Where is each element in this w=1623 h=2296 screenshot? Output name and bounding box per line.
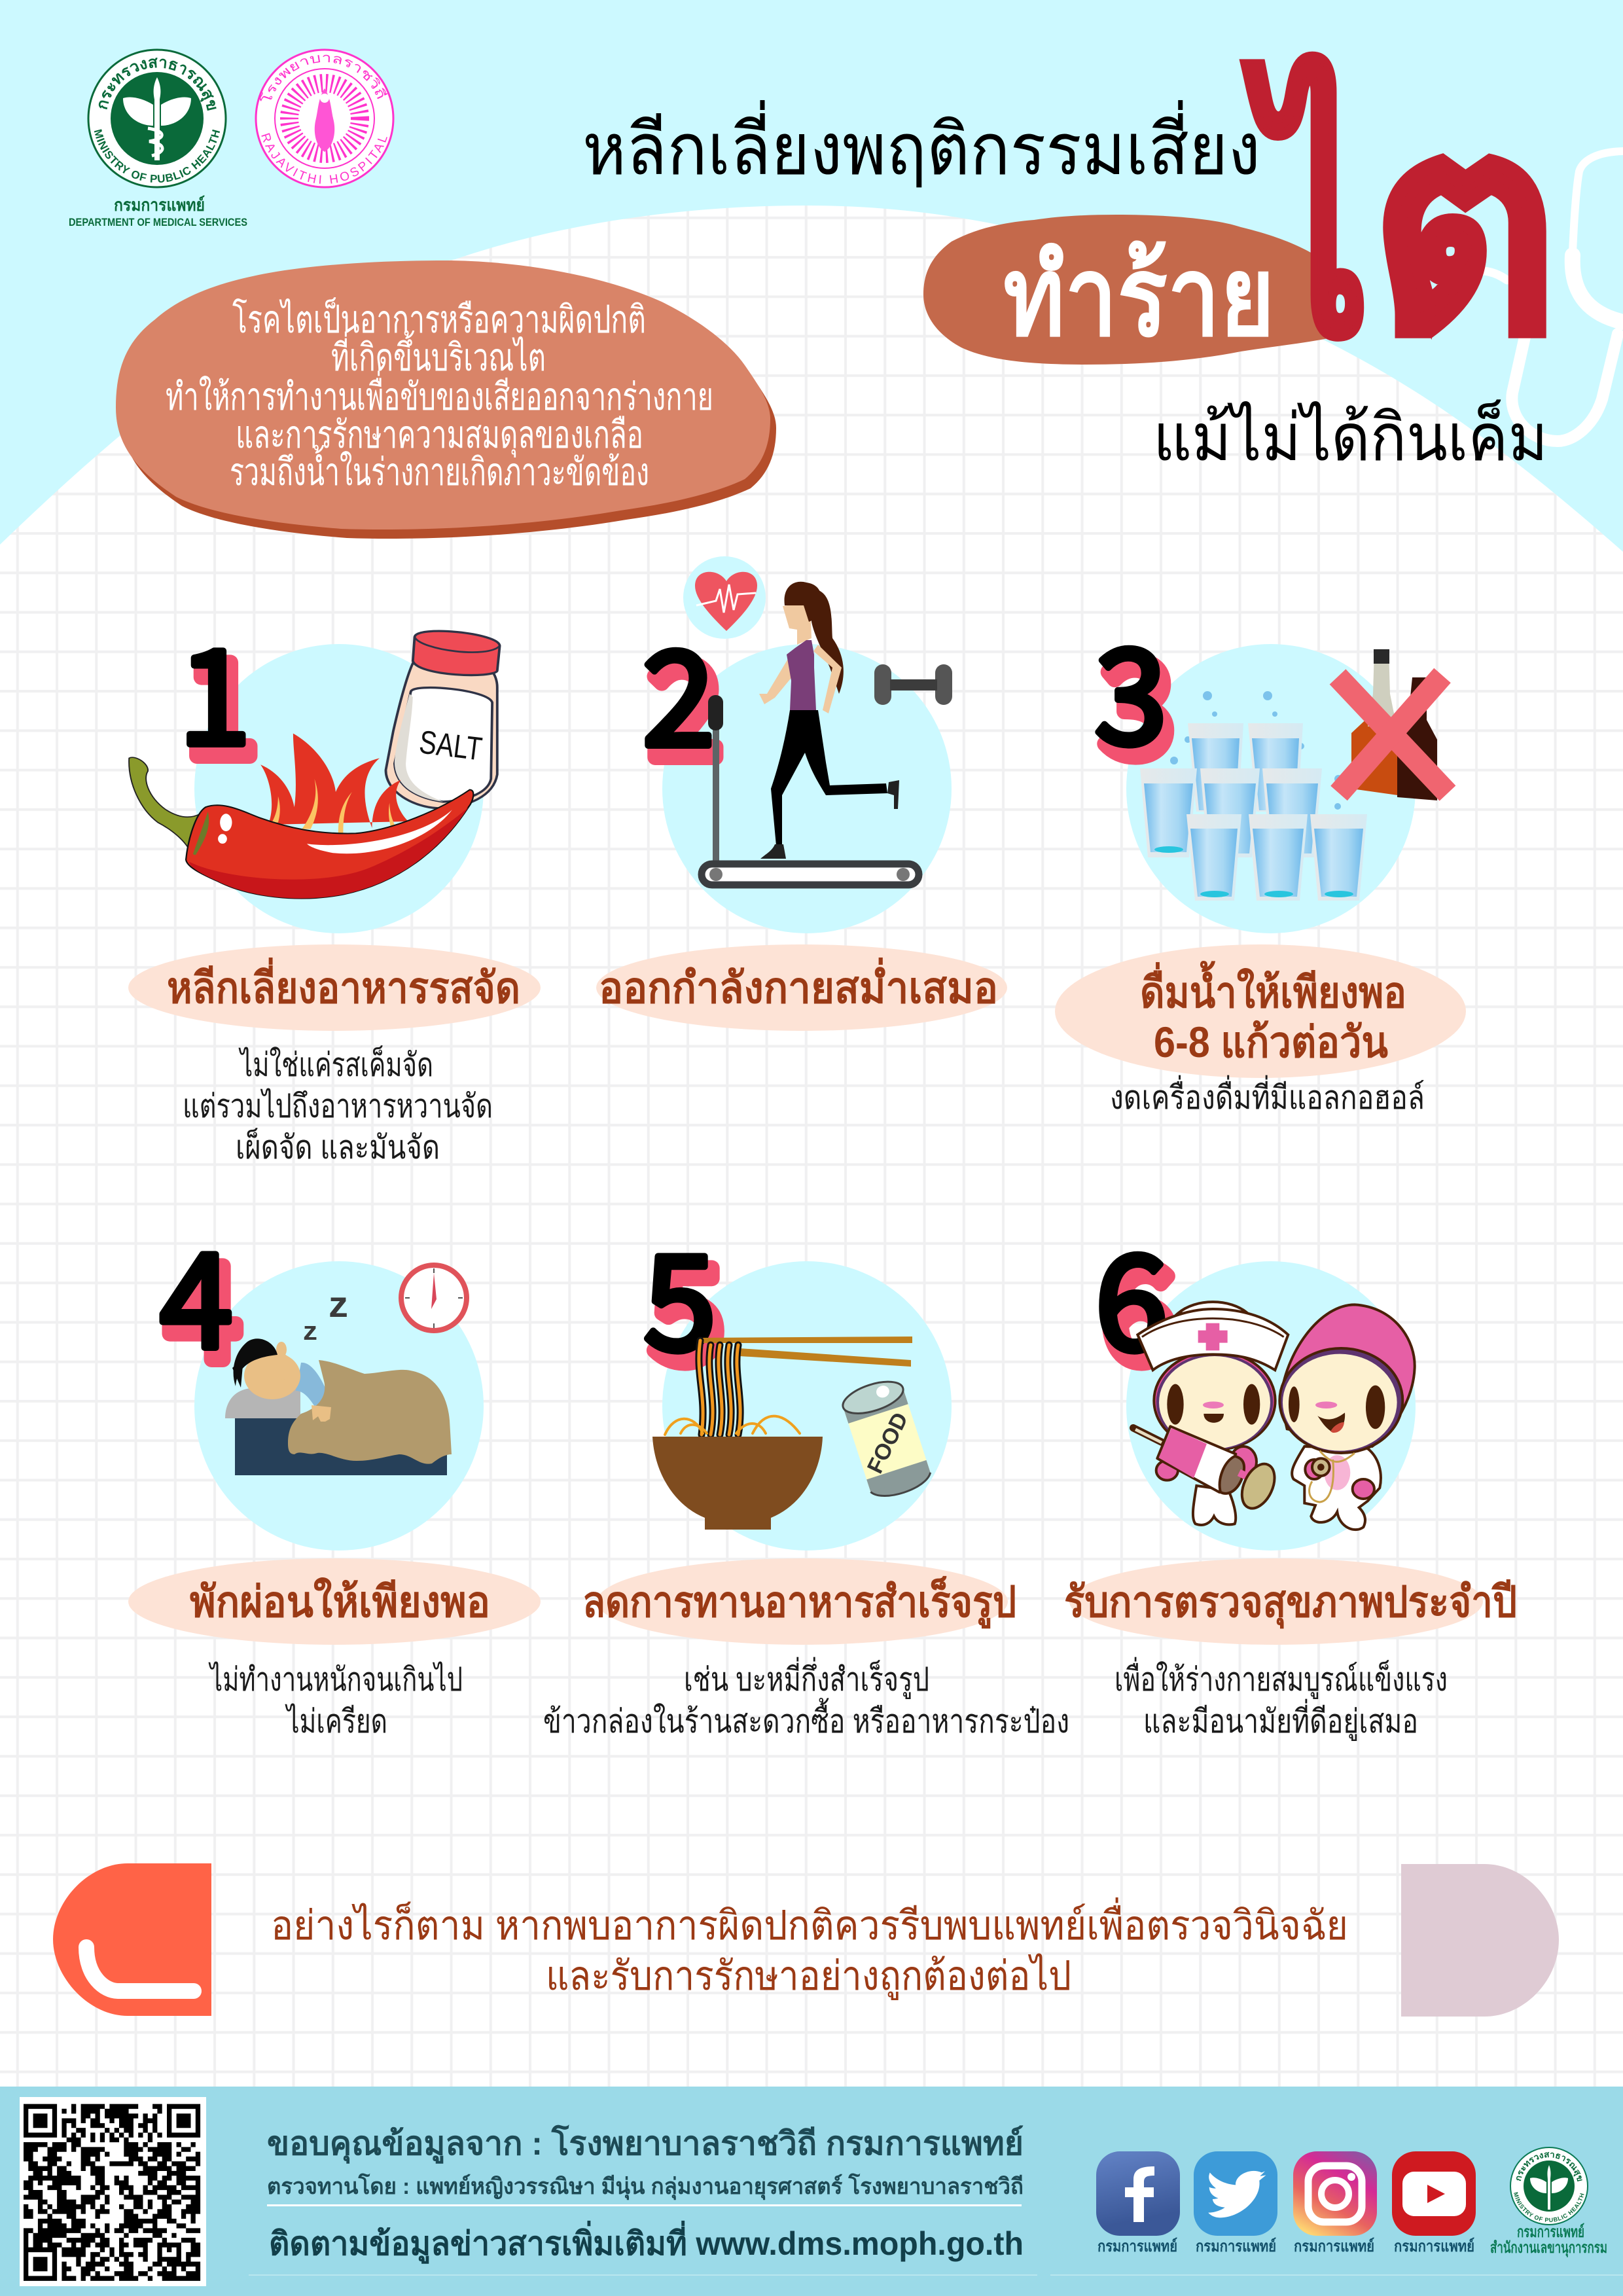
heading: tip 3: 6-8 แก้วต่อวัน	[1154, 1018, 1388, 1066]
heading: tip 5: ลดการทานอาหารสำเร็จรูป	[582, 1575, 1016, 1629]
text: tip 6 detail: เพื่อให้ร่างกายสมบูรณ์แข็งแรง	[1115, 1657, 1448, 1699]
noodles	[665, 1340, 800, 1435]
pill: tip 6 heading	[1069, 1558, 1483, 1645]
number 2: 2	[642, 594, 715, 783]
panel: description blob	[116, 260, 776, 539]
title: kidney word	[1239, 50, 1560, 399]
icon: instagram	[1293, 2151, 1377, 2236]
bracket: orange left	[53, 1863, 211, 2016]
number 4: 4	[160, 1196, 233, 1386]
bed	[235, 1418, 447, 1475]
title: highlight word: ทำร้าย	[1003, 235, 1275, 359]
text: tip 4 detail: ไม่ทำงานหนักจนเกินไป	[208, 1661, 463, 1698]
description text: ทำให้การทำงานเพื่อขับของเสียออกจากร่างกาย	[166, 370, 713, 418]
description text: และการรักษาความสมดุลของเกลือ	[236, 414, 643, 458]
social labels: กรมการแพทย์	[1097, 2237, 1177, 2255]
hand	[312, 1405, 331, 1422]
icon: ministry seal small: MINISTRY OF PUBLIC HEALTH	[1514, 2192, 1584, 2222]
back row glasses	[1188, 723, 1303, 812]
pill: tip 4 heading	[128, 1558, 541, 1645]
bracket: pale pink right	[1401, 1864, 1559, 2017]
red cross	[1338, 675, 1448, 793]
panel: footer	[0, 2087, 1623, 2296]
salt jar body	[385, 663, 497, 808]
closing message	[271, 1897, 1348, 2000]
pill: tip 5 heading	[597, 1558, 1008, 1645]
logo: ministry of public health: กระทรวงสาธารณสุข	[98, 58, 217, 111]
caduceus emblem	[123, 77, 191, 160]
title: kidney word: ไ	[1239, 50, 1371, 399]
icon: glasses of water and crossed-out bottles	[1140, 649, 1448, 901]
heading: tip 6: รับการตรวจสุขภาพประจำปี	[1064, 1577, 1517, 1629]
heading: tip 1: หลีกเลี่ยงอาหารรสจัด	[167, 957, 520, 1012]
social labels: กรมการแพทย์	[1196, 2237, 1276, 2255]
heading: tip 3	[1140, 960, 1406, 1066]
sleep z letters	[303, 1283, 348, 1346]
salt jar cap	[413, 631, 500, 675]
logo: ministry of public health	[88, 48, 226, 188]
pill: tip 2 heading	[596, 944, 1007, 1031]
title: highlight blob	[923, 215, 1335, 365]
bowl	[652, 1437, 823, 1530]
runner	[759, 582, 899, 859]
credit: reviewer: ตรวจทานโดย : แพทย์หญิงวรรณิษา มีนุ่น กลุ่มงานอายุรศาสตร์ โรงพยาบาลราชวิถี	[267, 2173, 1024, 2200]
title: first line: หลีกเลี่ยงพฤติกรรมเสี่ยง	[582, 99, 1260, 190]
text: tip 1 detail	[183, 1045, 493, 1166]
food can	[839, 1375, 934, 1502]
closing message: และรับการรักษาอย่างถูกต้องต่อไป	[546, 1953, 1071, 2000]
icon: heart rate bubble	[683, 556, 766, 639]
icon: woman running on treadmill	[702, 582, 952, 885]
text: tip 1 detail: เผ็ดจัด และมันจัด	[236, 1128, 440, 1166]
front arm	[759, 655, 800, 704]
salt jar label	[395, 688, 492, 802]
salt label text: SALT	[418, 723, 484, 768]
credit: website: ติดตามข้อมูลข่าวสารเพิ่มเติมที่ www.dms.moph.go.th	[269, 2221, 1024, 2264]
number 1: 1	[185, 604, 259, 794]
front row glasses	[1186, 814, 1367, 901]
nurse mascot	[1133, 1302, 1288, 1525]
icon: ministry seal small: กระทรวงสาธารณสุข	[1516, 2152, 1582, 2181]
chili stem	[129, 757, 209, 855]
QR code	[20, 2097, 206, 2286]
arm	[296, 1363, 335, 1419]
icon: ministry seal small	[1510, 2147, 1588, 2225]
leggings	[771, 710, 887, 846]
number 3: 3	[1101, 603, 1174, 793]
can label: FOOD	[863, 1408, 913, 1477]
description text: ที่เกิดขึ้นบริเวณไต	[331, 331, 546, 379]
flames	[260, 734, 408, 828]
icon: facebook	[1096, 2151, 1180, 2236]
logo caption: department of medical services: DEPARTMENT OF MEDICAL SERVICES	[69, 216, 247, 228]
chopsticks	[700, 1336, 912, 1343]
closing message: อย่างไรก็ตาม หากพบอาการผิดปกติควรรีบพบแพทย์เพื่อตรวจวินิจฉัย	[271, 1897, 1348, 1948]
purple top	[787, 640, 816, 710]
number 5: 5	[643, 1198, 717, 1388]
heading: tip 2: ออกกำลังกายสม่ำเสมอ	[599, 957, 998, 1012]
logo caption: department of medical services: กรมการแพทย์	[114, 195, 205, 215]
social labels: กรมการแพทย์	[1394, 2237, 1474, 2255]
heading: tip 4: พักผ่อนให้เพียงพอ	[190, 1576, 490, 1626]
logo: ministry of public health: MINISTRY OF PUBLIC HEALTH	[94, 129, 220, 183]
icon: salt shaker and chili with flames	[129, 631, 500, 899]
text: tip 6 detail	[1115, 1657, 1448, 1741]
text: tip 1 detail: แต่รวมไปถึงอาหารหวานจัด	[183, 1088, 493, 1124]
water drops	[1170, 691, 1342, 810]
social labels	[1097, 2237, 1474, 2255]
icon: youtube	[1392, 2151, 1476, 2236]
back arm	[813, 645, 842, 713]
icon: nurse and doctor mascots	[1133, 1302, 1415, 1530]
text: tip 4 detail: ไม่เครียด	[285, 1703, 387, 1740]
number 5: 5	[651, 1210, 724, 1399]
sleep z letters: z	[329, 1283, 348, 1325]
number 2: 2	[649, 605, 722, 795]
logo: rajavithi hospital	[255, 48, 394, 188]
title: sub line: แม้ไม่ได้กินเค็ม	[1153, 399, 1548, 475]
doctor mascot	[1279, 1304, 1415, 1530]
logo: rajavithi hospital: โรงพยาบาลราชวิถี	[259, 55, 387, 101]
pill: tip 1 heading	[128, 944, 541, 1031]
text: tip 3 detail: งดเครื่องดื่มที่มีแอลกอฮอล์	[1110, 1075, 1425, 1116]
logo caption: department of medical services	[69, 195, 247, 228]
chili body	[186, 790, 473, 899]
icon: sleeping person and clock	[225, 1265, 467, 1475]
syringe	[1133, 1428, 1162, 1442]
treadmill	[702, 695, 919, 885]
icon: twitter	[1194, 2151, 1277, 2236]
seal labels	[1490, 2223, 1607, 2258]
text: tip 5 detail	[543, 1657, 1069, 1740]
heading: tip 3: ดื่มน้ำให้เพียงพอ	[1140, 960, 1406, 1016]
seal labels: กรมการแพทย์	[1517, 2223, 1584, 2241]
description text: รวมถึงน้ำในร่างกายเกิดภาวะขัดข้อง	[230, 445, 649, 493]
pill: tip 3 heading	[1055, 944, 1466, 1078]
ponytail	[812, 589, 844, 694]
icon: noodle bowl and food can	[652, 1336, 934, 1530]
text: tip 6 detail: และมีอนามัยที่ดีอยู่เสมอ	[1143, 1699, 1418, 1741]
logo: rajavithi hospital: RAJAVITHI HOSPITAL	[261, 133, 387, 184]
middle row glasses	[1140, 768, 1322, 857]
dumbbell	[874, 664, 952, 705]
number 3: 3	[1094, 592, 1168, 781]
social labels: กรมการแพทย์	[1294, 2237, 1374, 2255]
number 6: 6	[1102, 1210, 1175, 1399]
blanket	[288, 1360, 452, 1464]
head	[244, 1352, 300, 1399]
circle backdrops for the six tips	[194, 644, 1416, 1551]
text: tip 1 detail: ไม่ใช่แค่รสเค็มจัด	[238, 1045, 433, 1083]
icon: stethoscope outline	[1444, 151, 1623, 441]
description text: โรคไตเป็นอาการหรือความผิดปกติ	[232, 297, 646, 341]
text: tip 5 detail: เช่น บะหมี่กึ่งสำเร็จรูป	[684, 1657, 929, 1699]
credit: source: ขอบคุณข้อมูลจาก : โรงพยาบาลราชวิถี กรมการแพทย์	[267, 2124, 1024, 2164]
neck and face	[783, 602, 812, 645]
number 6: 6	[1095, 1198, 1168, 1388]
number 1: 1	[178, 592, 251, 782]
title: kidney word: ต	[1369, 59, 1560, 395]
text: tip 5 detail: ข้าวกล่องในร้านสะดวกซื้อ หรืออาหารกระป๋อง	[543, 1698, 1069, 1740]
description text	[166, 297, 713, 493]
text: tip 4 detail	[208, 1661, 463, 1740]
pillow	[225, 1388, 300, 1418]
clock	[401, 1265, 467, 1331]
sleep z letters: z	[303, 1317, 317, 1346]
bottles	[1351, 715, 1407, 797]
number 4: 4	[167, 1208, 240, 1397]
